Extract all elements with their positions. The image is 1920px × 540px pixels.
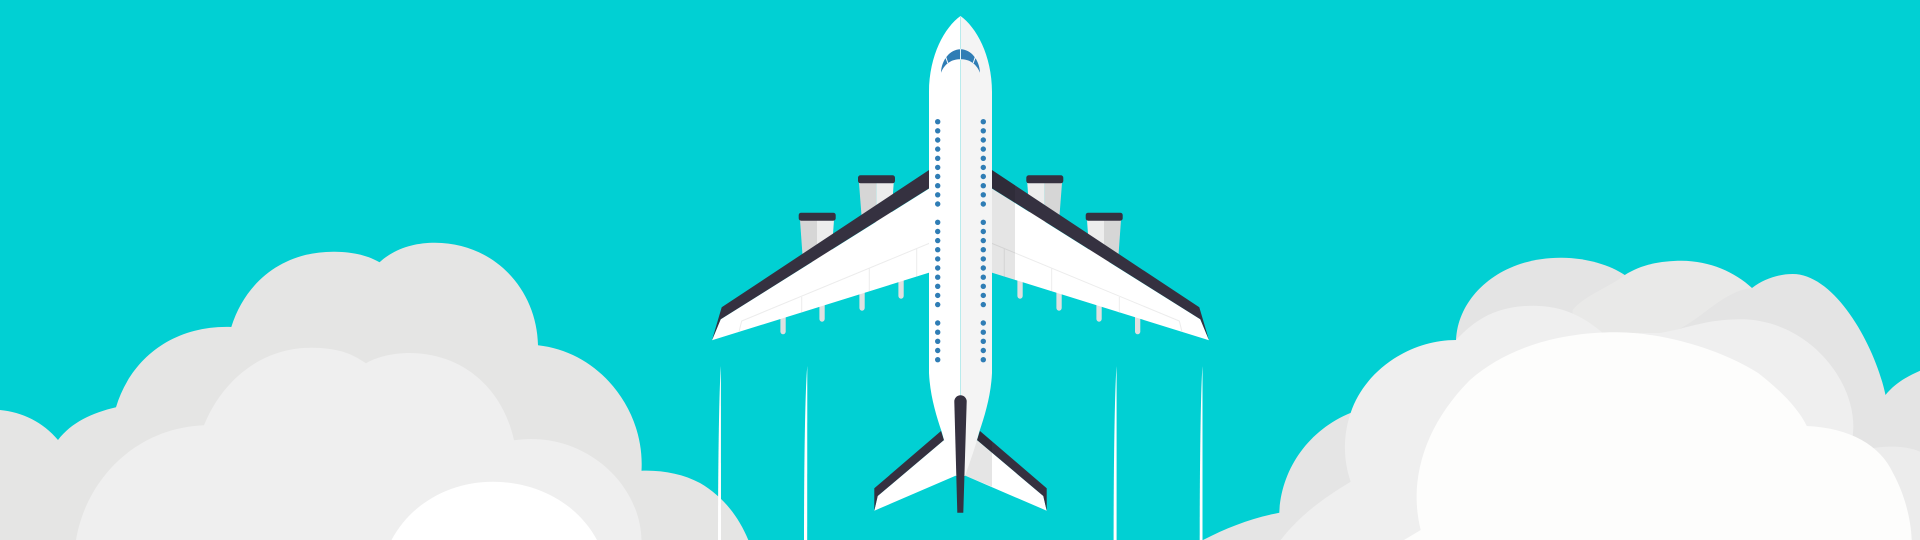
front right white cloud <box>1404 332 1912 540</box>
engine: inner right <box>1026 175 1063 222</box>
far left lobe of right cloud <box>1203 413 1400 540</box>
right tail stabilizer <box>963 431 1047 511</box>
front left white cloud <box>392 482 597 540</box>
right wing <box>991 169 1209 340</box>
engine: inner left <box>858 175 895 222</box>
contrail 4 <box>1200 366 1202 540</box>
flap tracks <box>780 260 1140 334</box>
second back lobe of right cloud <box>1572 261 1780 400</box>
left cloud group <box>0 243 748 540</box>
contrails <box>718 366 1202 540</box>
cockpit windshield <box>941 49 980 73</box>
contrail 3 <box>1114 366 1117 540</box>
middle right cloud <box>1281 306 1853 540</box>
tail fin <box>954 395 967 513</box>
third back lobe of right cloud <box>1677 274 1920 540</box>
engine: outer right <box>1086 213 1123 262</box>
far right small cloud <box>1870 447 1920 540</box>
right cloud group <box>1203 258 1920 540</box>
contrail 2 <box>804 366 807 540</box>
fuselage <box>929 16 992 476</box>
windows left column <box>935 119 940 362</box>
engine: outer left <box>799 213 836 262</box>
left tail stabilizer <box>874 431 958 511</box>
windows right column <box>981 119 986 362</box>
airplane <box>712 16 1209 513</box>
back left cloud <box>0 243 748 540</box>
back lobe of right cloud <box>1456 258 1640 400</box>
contrail 1 <box>718 366 721 540</box>
middle left cloud <box>76 348 642 540</box>
left wing <box>712 169 930 340</box>
